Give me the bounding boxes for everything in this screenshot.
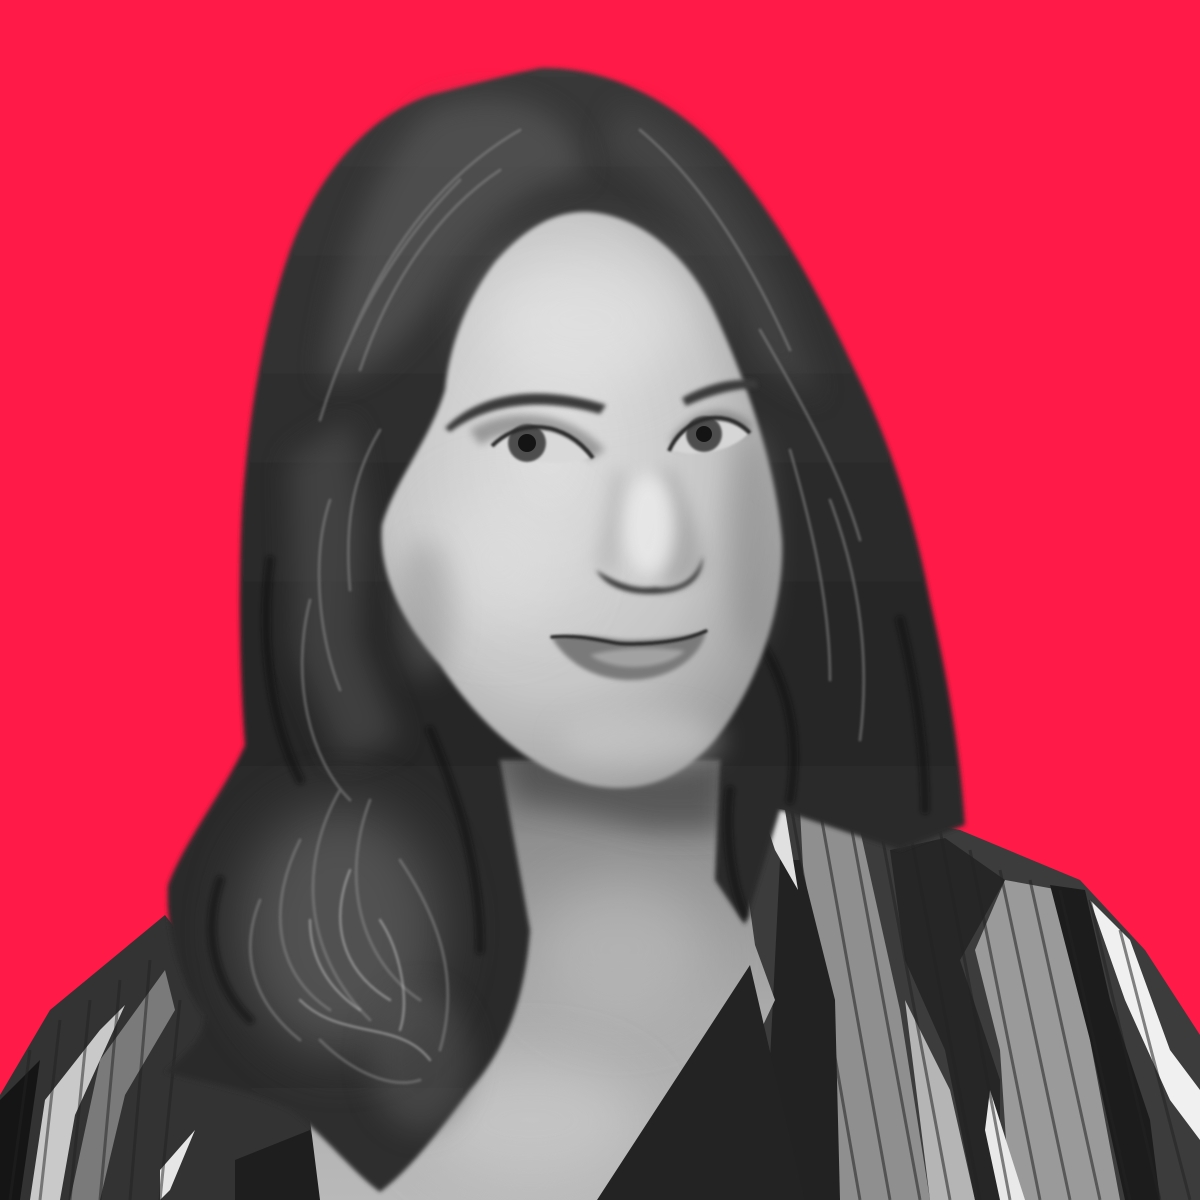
hair shading (212, 99, 925, 1130)
nose (596, 470, 703, 594)
face (382, 212, 782, 788)
jacket right (745, 790, 1200, 1200)
right eye and brow (669, 380, 758, 453)
neck and chest (310, 720, 775, 1200)
hair back (165, 68, 965, 1192)
mouth (552, 631, 706, 680)
jacket left (0, 915, 340, 1200)
black top (597, 965, 805, 1200)
left eye and brow (445, 394, 606, 463)
